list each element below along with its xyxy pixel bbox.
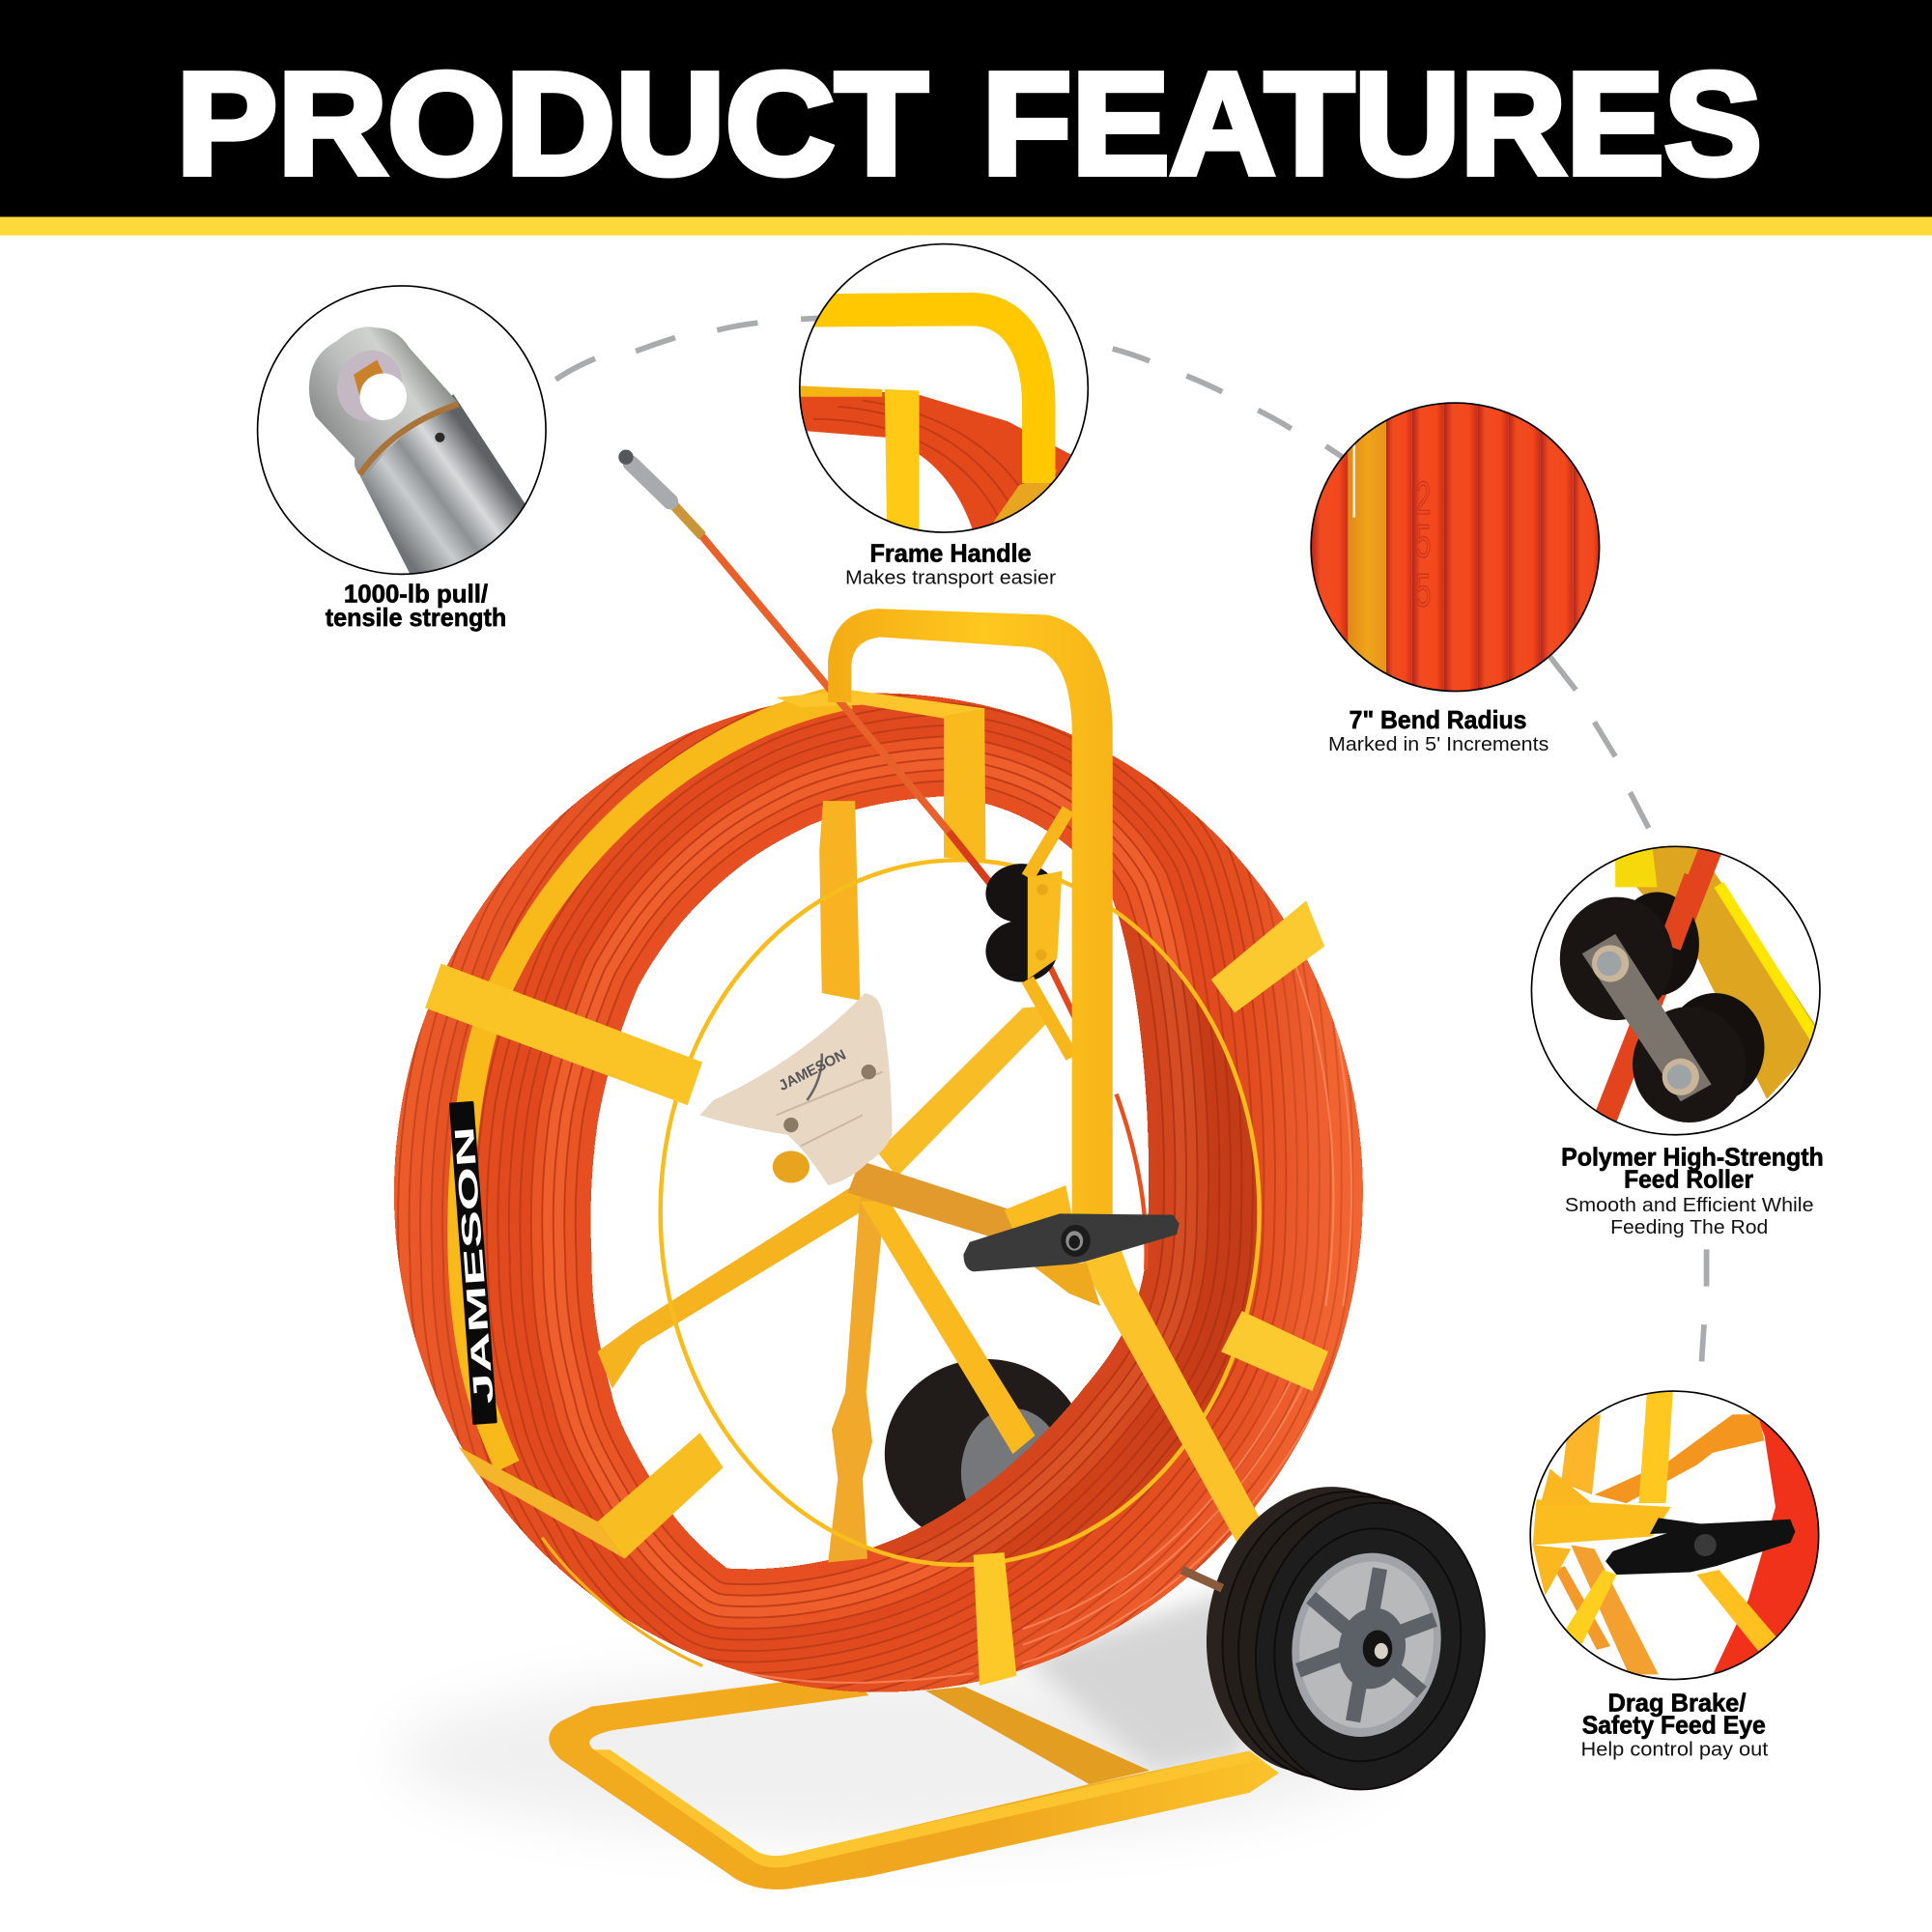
rim band with straps (425, 690, 1328, 1686)
label: feed roller (1561, 1145, 1824, 1238)
wheel rim (1278, 1541, 1456, 1748)
label: feed roller: Smooth and Efficient While (1565, 1195, 1814, 1216)
brand label on rim (447, 1101, 500, 1425)
callout: pulling eye (258, 286, 546, 632)
callout: frame handle (788, 244, 1088, 589)
label: feed roller: Feed Roller (1624, 1167, 1753, 1194)
label: feed roller: Feeding The Rod (1610, 1217, 1768, 1238)
label: feed roller: Polymer High-Strength (1561, 1145, 1824, 1172)
canvas storage pouch (699, 993, 892, 1185)
product: fiberglass rod reel on cart (382, 450, 1507, 1889)
footage marks: 5 (1415, 516, 1431, 567)
footage marks (1416, 481, 1430, 608)
label: frame handle: Makes transport easier (845, 568, 1056, 589)
drag brake T-handle (963, 1213, 1179, 1271)
fiberglass rod with pulling eye (618, 450, 1074, 1016)
title (176, 43, 1762, 205)
circle image: handle (800, 292, 1070, 529)
cart handle tube (828, 609, 1113, 1233)
title: FEATURES (982, 43, 1762, 205)
footage marks: 5 (1415, 565, 1431, 616)
canvas storage pouch: JAMESON (777, 1046, 849, 1094)
label: drag brake: Help control pay out (1580, 1740, 1769, 1761)
label: pull strength: tensile strength (326, 605, 506, 632)
front wheel (1184, 1468, 1507, 1807)
circle image: eye (309, 327, 526, 574)
circle image: rod stripes (1311, 403, 1600, 692)
callout: feed roller (1531, 838, 1824, 1238)
label: bend radius (1328, 707, 1548, 755)
callout: drag brake (1530, 1386, 1830, 1761)
thin rod strand inside reel (1117, 1094, 1147, 1269)
title: PRODUCT (176, 43, 927, 205)
cart base frame (549, 1673, 1279, 1889)
axle tube (848, 1161, 1023, 1244)
orange rod coil (382, 684, 1380, 1707)
label: frame handle (845, 541, 1056, 589)
label: drag brake: Safety Feed Eye (1582, 1713, 1766, 1740)
label: pull strength: 1000-lb pull/ (344, 582, 488, 609)
dashed connector arc (555, 318, 1707, 1361)
feed rollers (985, 810, 1072, 1057)
brand label on rim: JAMESON (449, 1125, 499, 1406)
label: frame handle: Frame Handle (870, 541, 1032, 568)
header banner (0, 0, 1932, 236)
wire hoop (661, 860, 1260, 1565)
reel spokes (598, 801, 1047, 1562)
floor shadow (394, 1589, 1380, 1842)
label: bend radius: 7" Bend Radius (1350, 707, 1526, 734)
wheel axle (1181, 1570, 1222, 1588)
label: drag brake (1580, 1690, 1769, 1761)
cart diagonal strut (1005, 1185, 1262, 1545)
label: drag brake: Drag Brake/ (1608, 1690, 1746, 1718)
label: bend radius: Marked in 5' Increments (1328, 734, 1548, 755)
circle image: brake (1532, 1391, 1818, 1675)
label: pull strength (326, 582, 506, 632)
callout: bend radius (1311, 403, 1600, 755)
circle image: rollers (1559, 847, 1815, 1122)
rear wheel (885, 1359, 1087, 1548)
footage marks: 2 (1415, 472, 1431, 525)
